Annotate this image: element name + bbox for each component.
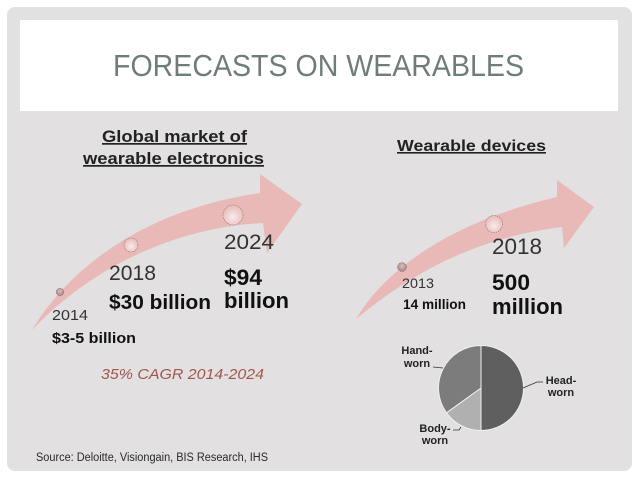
label: 2013: 14 million (403, 297, 466, 312)
label: 2024: 2024 (224, 231, 274, 254)
label: 2013: 2013 (402, 275, 434, 291)
label: 2018 (109, 262, 211, 314)
marker: 2018 (486, 216, 502, 232)
label: 2018: $30 billion (109, 292, 211, 314)
label: 2014: 2014 (52, 308, 88, 324)
label: hand-worn: Hand- (401, 345, 433, 357)
slice: body-worn (446, 388, 481, 430)
label: body-worn: worn (421, 435, 448, 447)
leader lines (433, 367, 543, 430)
label: hand-worn: worn (403, 358, 430, 370)
marker: 2013 (398, 262, 406, 272)
heading: global market: Global market of (102, 127, 247, 146)
source note: Source: Deloitte, Visiongain, BIS Research, IHS (36, 452, 268, 464)
slice: head-worn (481, 346, 524, 430)
slice: hand-worn (439, 346, 481, 413)
label: 2018: million (492, 294, 563, 319)
panel: wearable devices (356, 138, 594, 447)
callout: CAGR: 35% CAGR 2014-2024 (101, 367, 264, 383)
marker: 2024 (223, 205, 243, 225)
heading: global market: wearable electronics (82, 149, 264, 168)
heading: global market (82, 127, 264, 168)
title banner (20, 20, 618, 111)
label: 2018: 500 (492, 270, 530, 295)
label: 2024: billion (224, 288, 289, 313)
arrow: device growth (356, 180, 594, 319)
marker: 2014 (56, 288, 64, 296)
title: FORECASTS ON WEARABLES (113, 48, 524, 83)
label: 2014: $3-5 billion (52, 331, 136, 347)
label: 2014 (52, 308, 136, 347)
label: head-worn: worn (547, 387, 574, 399)
pie chart: form factors (401, 345, 577, 447)
label: body-worn: Body- (419, 423, 451, 435)
panel: global market of wearable electronics (32, 127, 302, 383)
label: 2024 (224, 231, 289, 313)
label: head-worn: Head- (546, 375, 576, 387)
label: 2018: 2018 (109, 262, 156, 285)
label: 2018: 2018 (492, 234, 542, 259)
label: 2013 (402, 275, 466, 312)
heading: wearable devices: Wearable devices (397, 138, 546, 155)
label: 2018 (492, 234, 563, 319)
arrow: market growth (32, 174, 302, 330)
marker: 2018 (124, 238, 138, 252)
label: 2024: $94 (224, 265, 263, 290)
